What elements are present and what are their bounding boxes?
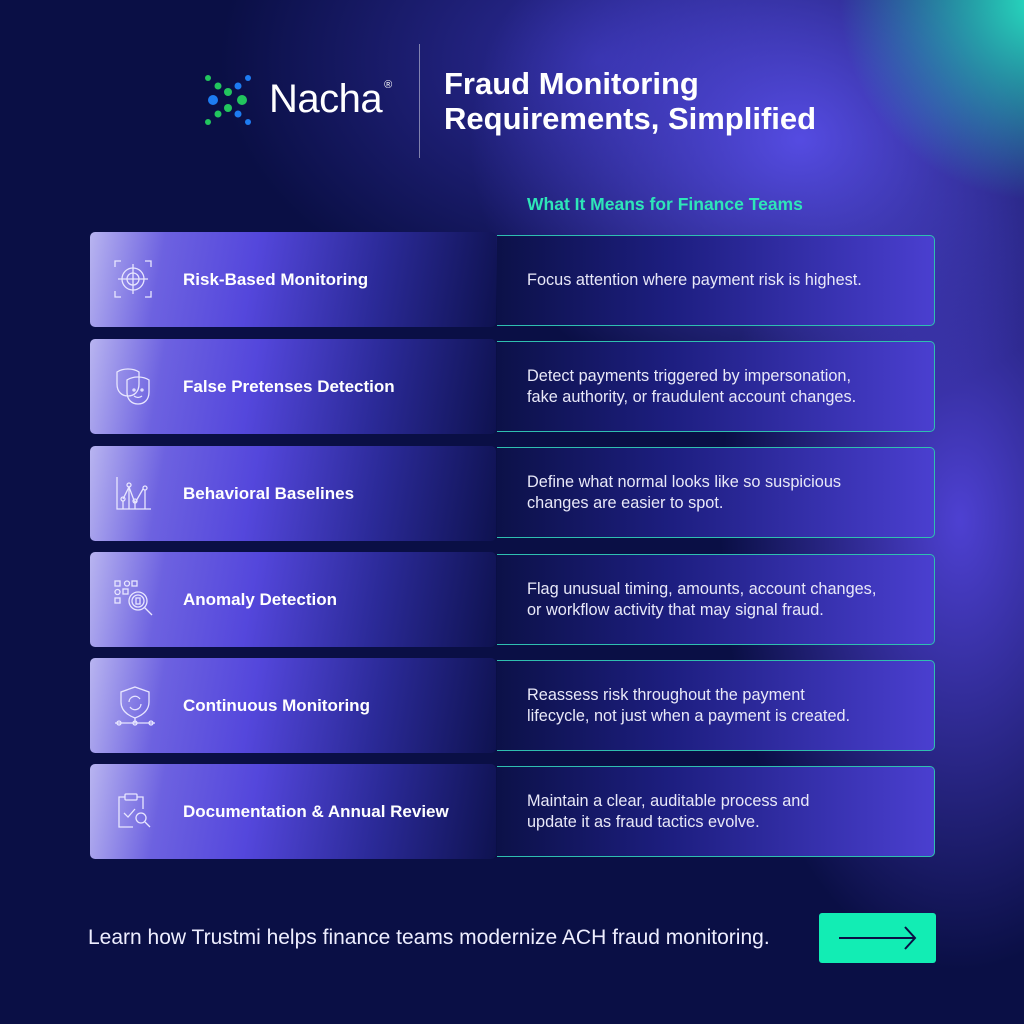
icon: magnifier grid [114,580,152,616]
text: Anomaly Detection [183,590,337,608]
footer text: Learn how Trustmi helps finance teams modernize ACH fraud monitoring. [88,926,770,949]
icon: nacha dots [205,75,251,125]
row 4: or workflow activity that may signal fraud. [527,600,824,618]
icon: clipboard [118,793,150,828]
logo text: Nacha® [269,77,392,121]
text: False Pretenses Detection [183,376,395,396]
row 2: Detect payments triggered by impersonation, [527,366,851,384]
title: Fraud Monitoring [444,66,699,101]
row 4 [497,554,935,645]
row 6: Maintain a clear, auditable process and [527,792,809,810]
text: Risk-Based Monitoring [183,270,368,288]
text: Behavioral Baselines [183,484,354,502]
row 3 [497,447,935,538]
row 6 [497,766,935,857]
row 1 [497,235,935,326]
icon: masks [116,368,150,405]
button: arrow [819,913,936,963]
row 6: update it as fraud tactics evolve. [527,812,760,830]
icon: chart [116,477,151,510]
header logo [205,75,392,125]
row 5: lifecycle, not just when a payment is created. [527,706,850,724]
title [444,66,816,136]
row 3: Define what normal looks like so suspicious [527,472,841,490]
row 3: changes are easier to spot. [527,494,723,512]
icon: target [114,260,152,298]
row 4: Flag unusual timing, amounts, account changes, [527,580,876,598]
text: Documentation & Annual Review [183,802,449,820]
divider [419,44,420,158]
column heading: What It Means for Finance Teams [527,194,803,214]
row 1: Focus attention where payment risk is highest. [527,271,862,289]
row 5 [497,660,935,751]
text: Continuous Monitoring [183,696,370,714]
row 2 [497,341,935,432]
icon: shield [115,686,155,726]
title: Requirements, Simplified [444,101,816,136]
row 2: fake authority, or fraudulent account changes. [527,388,856,406]
row 5: Reassess risk throughout the payment [527,686,805,704]
